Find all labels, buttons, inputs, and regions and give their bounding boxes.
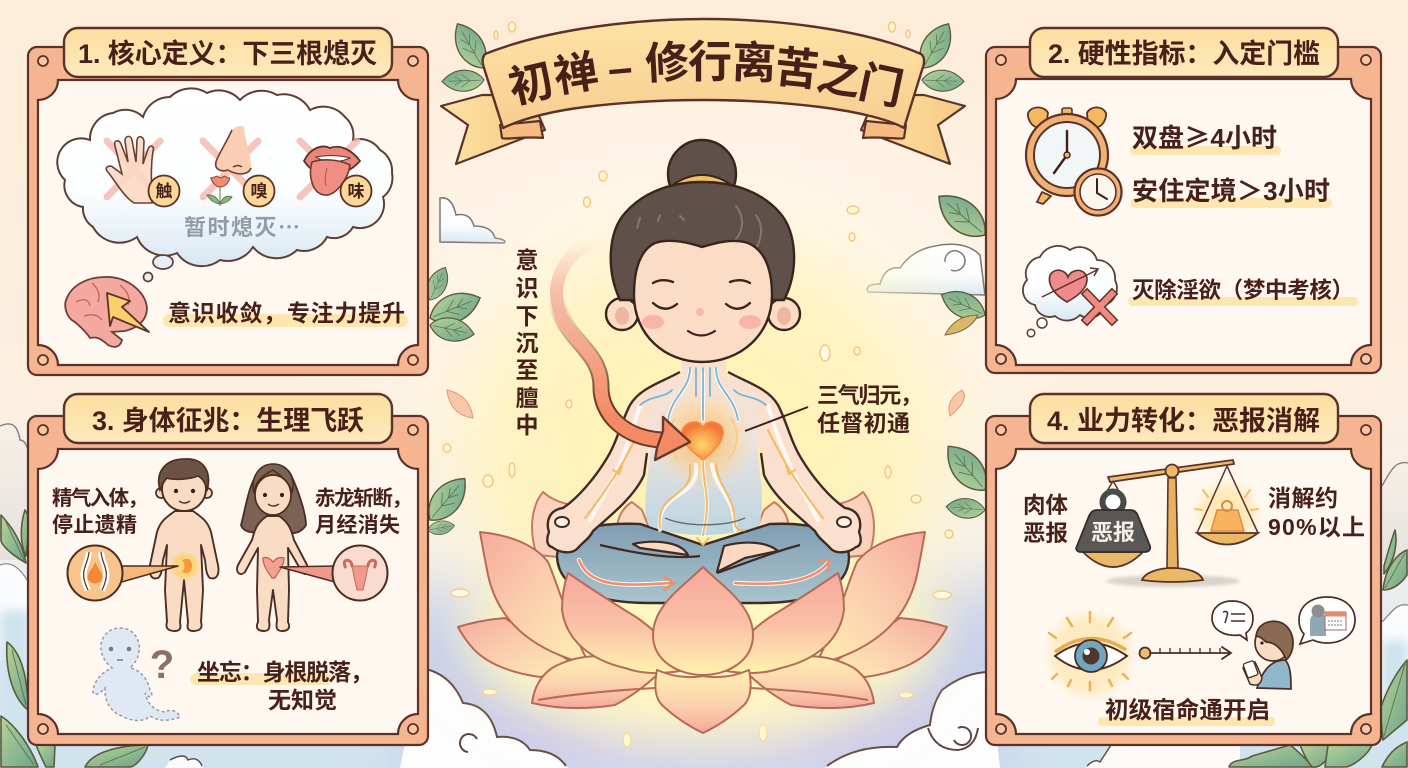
heart thought icon — [1023, 246, 1117, 337]
title text: 禅 — [551, 47, 602, 102]
left label — [52, 487, 148, 537]
legs — [557, 524, 849, 603]
title text: 离 — [731, 38, 777, 89]
right label: 月经消失 — [315, 514, 400, 537]
lotus centre bud — [653, 567, 753, 675]
panel 4 heading — [1030, 394, 1338, 443]
female figure — [237, 464, 308, 631]
side margin clouds — [0, 424, 1408, 760]
panel 1: core definition — [28, 28, 428, 375]
vertical caption: 意 — [516, 247, 538, 273]
neck — [682, 355, 726, 380]
ears — [606, 298, 800, 330]
question speech bubble — [1212, 601, 1253, 640]
zoom callout: male — [68, 546, 178, 600]
right label — [315, 487, 412, 537]
panel 2 heading: 2. 硬性指标：入定门槛 — [1048, 39, 1320, 69]
panel 2 heading — [1030, 28, 1338, 77]
taste badge: 味 — [348, 182, 364, 201]
vertical caption: 沉 — [516, 330, 538, 356]
panel 3 heading: 3. 身体征兆：生理飞跃 — [92, 406, 364, 436]
reduction label: 90%以上 — [1268, 514, 1365, 540]
heart glow — [651, 388, 755, 492]
title text — [504, 38, 908, 115]
lotus side petals — [480, 532, 925, 665]
vertical caption: 识 — [516, 275, 538, 301]
alarm clock icon — [1026, 107, 1122, 216]
reduction label: 消解约 — [1268, 485, 1338, 511]
touch badge — [148, 176, 180, 206]
mid background clouds — [440, 198, 985, 295]
lotus — [458, 532, 947, 733]
ghost figure with question mark — [93, 628, 180, 720]
physical retribution label: 肉体 — [1023, 493, 1068, 518]
energy channels — [579, 368, 829, 590]
sitting-forget caption: 无知觉 — [268, 687, 337, 713]
title text: 苦 — [773, 43, 821, 96]
panel 3 heading — [64, 394, 392, 443]
torso — [645, 374, 762, 535]
banner fold right — [863, 121, 906, 139]
lotus far petals — [458, 618, 947, 677]
desire eradication requirement: 灭除淫欲（梦中考核） — [1132, 277, 1354, 303]
hand icon with cross — [106, 136, 160, 203]
panel 4 heading: 4. 业力转化：恶报消解 — [1047, 406, 1320, 436]
sitting-forget caption: 坐忘：身根脱落， — [197, 659, 373, 685]
thought cloud: senses — [57, 88, 393, 266]
banner ribbon — [483, 19, 924, 128]
right arm — [728, 372, 861, 552]
title text: 行 — [688, 38, 732, 87]
hair highlights — [637, 206, 761, 255]
central glow — [368, 148, 1038, 768]
title banner — [441, 19, 965, 164]
double-lotus sitting requirement: 双盘≥4小时 — [1132, 118, 1277, 155]
mudra rings — [555, 517, 851, 527]
thought bubbles — [144, 255, 173, 282]
hair bun — [668, 140, 736, 208]
shirt hem — [665, 518, 745, 525]
vertical caption: 至 — [516, 357, 538, 383]
heart centre — [682, 422, 723, 460]
title text: 之 — [813, 50, 864, 105]
balance scale: 恶报 — [1091, 520, 1135, 545]
title text: 修 — [644, 38, 690, 89]
crossed feet — [600, 542, 800, 573]
bottom clouds — [165, 668, 1240, 768]
lotus second-row petals — [562, 573, 844, 673]
panel 4 frame — [986, 416, 1381, 745]
physical retribution label — [1023, 493, 1068, 546]
stable samadhi requirement: 安住定境＞3小时 — [1132, 176, 1330, 206]
lotus low petals — [532, 656, 874, 708]
vertical caption: 下 — [516, 303, 538, 329]
right label: 赤龙斩断， — [315, 487, 412, 510]
left arm — [547, 372, 680, 552]
panel 1 frame — [28, 47, 428, 375]
meditating figure — [532, 140, 874, 603]
left label: 精气入体， — [52, 487, 148, 510]
reduction label — [1268, 485, 1365, 540]
descent arrow — [557, 243, 690, 460]
nose and flower icon with cross — [203, 126, 258, 206]
smell badge — [244, 176, 274, 206]
vertical caption: 中 — [516, 412, 538, 438]
floating petals and sparkles — [443, 22, 978, 747]
panel 1 heading: 1. 核心定义：下三根熄灭 — [78, 39, 377, 69]
sitting-forget caption — [190, 659, 373, 713]
consciousness caption: 意识收敛，专注力提升 — [168, 300, 405, 326]
taste badge — [340, 176, 372, 206]
three-qi caption — [745, 383, 922, 436]
panel 1 heading — [64, 28, 392, 77]
vertical caption — [516, 247, 538, 438]
mouth and tongue icon with cross — [300, 141, 360, 197]
banner left tail — [441, 95, 545, 164]
title text: 门 — [854, 58, 908, 115]
male figure — [149, 459, 219, 631]
title text: – — [606, 43, 634, 94]
panel 4: karma transformation — [986, 394, 1381, 745]
smell badge: 嗅 — [250, 182, 268, 201]
brain icon with arrow — [65, 277, 149, 347]
faded caption: 暂时熄灭⋯ — [184, 210, 300, 242]
physical retribution label: 恶报 — [1023, 521, 1068, 546]
balance scale — [1076, 460, 1258, 587]
panel 2: hard indicators — [986, 28, 1381, 373]
vertical caption: 膻 — [516, 385, 538, 411]
past-life caption: 初级宿命通开启 — [1105, 696, 1270, 723]
left label: 停止遗精 — [52, 514, 137, 537]
person recalling past life — [1243, 621, 1293, 689]
three-qi caption: 任督初通 — [817, 410, 910, 436]
memory speech bubble — [1299, 597, 1355, 644]
lotus halo — [468, 545, 938, 735]
ghost figure with question mark: ? — [150, 643, 174, 687]
title text: 初 — [504, 56, 558, 113]
glowing eye — [1049, 612, 1131, 695]
lotus base petal — [655, 670, 751, 733]
back lotus petals — [532, 492, 874, 560]
banner fold left — [500, 121, 543, 139]
panel 3: physical signs — [28, 394, 428, 745]
zoom callout: female — [280, 546, 388, 600]
face — [634, 241, 772, 362]
three-qi caption: 三气归元， — [817, 383, 922, 408]
panel 3 frame — [28, 416, 428, 745]
facial features — [642, 280, 761, 336]
panel 2 frame — [986, 47, 1381, 373]
banner right tail — [861, 95, 965, 164]
touch badge: 触 — [156, 182, 172, 201]
timeline arrow — [1140, 647, 1231, 659]
hair — [611, 182, 794, 300]
